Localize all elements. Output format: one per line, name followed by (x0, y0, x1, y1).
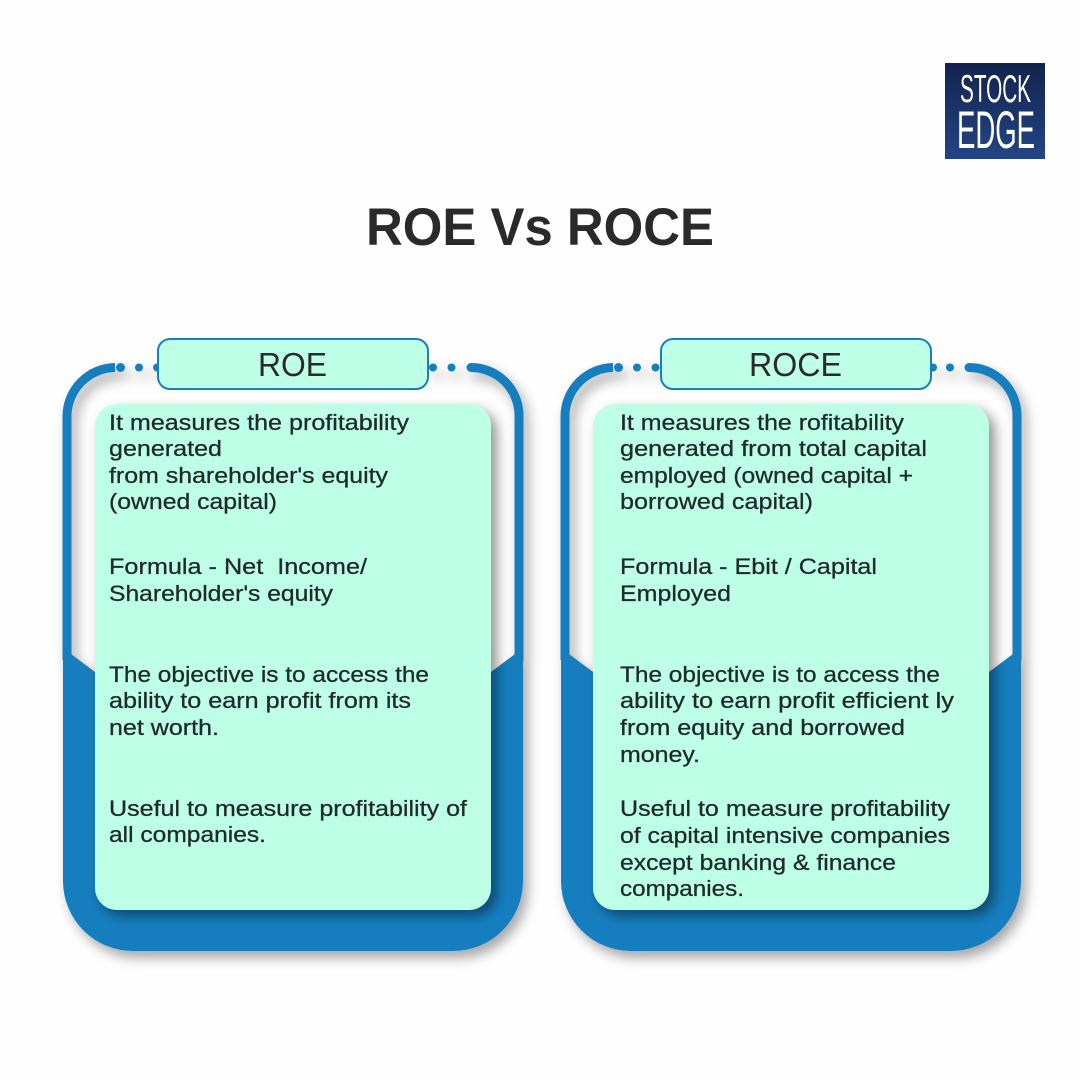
text block: ROCE objective (620, 662, 955, 767)
text block: ROCE definition (620, 410, 927, 514)
text block: ROCE definition: It measures the rofitability (620, 410, 905, 435)
panel: ROE (63, 339, 523, 951)
text block: ROCE usefulness: except banking & finance (620, 850, 896, 875)
text block: ROCE usefulness (620, 796, 951, 901)
text block: ROCE usefulness: companies. (620, 876, 744, 901)
text block: ROE usefulness: Useful to measure profitability of (109, 796, 468, 821)
text block: ROE definition: It measures the profitability (109, 410, 410, 435)
card: ROCE (593, 404, 989, 910)
text block: ROE usefulness (109, 796, 468, 847)
text block: ROE definition: (owned capital) (109, 489, 277, 514)
text block: ROCE definition: generated from total capital (620, 436, 927, 461)
text block: ROCE definition: employed (owned capital + (620, 463, 913, 488)
text block: ROE objective: The objective is to access the (109, 662, 429, 687)
card: ROE (95, 404, 491, 910)
heading pill: ROE (158, 339, 428, 389)
text block: ROE usefulness: all companies. (109, 822, 266, 847)
text block: ROCE formula: Employed (620, 581, 731, 606)
text block: ROE formula: Shareholder's equity (109, 581, 334, 606)
text block: ROCE objective: from equity and borrowed (620, 715, 905, 740)
text block: ROCE usefulness: of capital intensive companies (620, 823, 950, 848)
text block: ROCE definition: borrowed capital) (620, 489, 813, 514)
panel: ROCE (561, 339, 1021, 951)
text block: ROE formula (109, 554, 368, 606)
text block: ROE definition (109, 410, 410, 514)
text block: ROE objective (109, 662, 429, 740)
heading pill: ROCE: ROCE (749, 346, 842, 383)
heading pill: ROCE (661, 339, 931, 389)
text block: ROCE objective: money. (620, 742, 700, 767)
text block: ROE formula: Formula - Net Income/ (109, 554, 368, 579)
text block: ROE definition: generated (109, 436, 222, 461)
text block: ROE objective: net worth. (109, 715, 219, 740)
text block: ROE definition: from shareholder's equity (109, 463, 389, 488)
text block: ROCE formula: Formula - Ebit / Capital (620, 554, 877, 579)
panel frame: ROE (63, 363, 523, 951)
text block: ROCE usefulness: Useful to measure profitability (620, 796, 951, 821)
text block: ROCE objective: The objective is to access the (620, 662, 940, 687)
heading pill: ROE: ROE (258, 346, 327, 383)
panel frame: ROCE (561, 363, 1021, 951)
title: ROE Vs ROCE (366, 198, 714, 257)
text block: ROCE objective: ability to earn profit efficient ly (620, 688, 955, 713)
logo: Stock Edge (945, 63, 1045, 160)
text block: ROE objective: ability to earn profit from its (109, 688, 411, 713)
text block: ROCE formula (620, 554, 877, 606)
